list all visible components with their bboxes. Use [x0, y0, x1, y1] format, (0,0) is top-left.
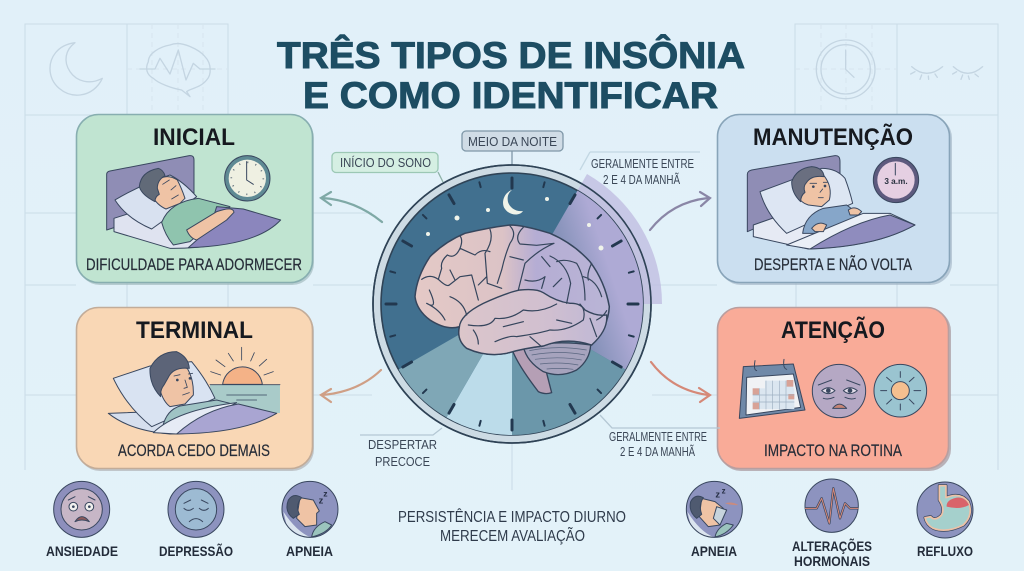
- sector: early waking mid: [399, 304, 512, 417]
- illustration: man waking at sunrise: [108, 347, 280, 434]
- text: persistencia: PERSISTÊNCIA E IMPACTO DIURNO: [398, 509, 626, 526]
- icon: apneia right: z: [715, 490, 720, 500]
- label: inicio do sono: INÍCIO DO SONO: [340, 155, 431, 170]
- illustration: man awake in bed with clock: [107, 156, 281, 248]
- icon: apneia left: [282, 481, 338, 537]
- panel: terminal: [76, 308, 314, 471]
- icon: apneia left: z: [319, 495, 324, 505]
- arrow: to manutencao: [650, 192, 710, 230]
- arrow: to inicial: [321, 192, 382, 222]
- label: meio da noite: MEIO DA NOITE: [468, 134, 557, 149]
- caption: acorda cedo: ACORDA CEDO DEMAIS: [118, 442, 270, 460]
- label: apneia left: APNEIA: [286, 543, 333, 559]
- sector: mid-night lavender: [512, 191, 643, 370]
- label: alteracoes hormonais: ALTERAÇÕES: [792, 537, 872, 554]
- caption: dificuldade: DIFICULDADE PARA ADORMECER: [86, 256, 302, 274]
- text: persistencia: [398, 509, 626, 545]
- caption: desperta: DESPERTA E NÃO VOLTA: [754, 254, 912, 274]
- label: geralmente entre top: GERALMENTE ENTRE: [591, 156, 694, 171]
- icon: apneia left: z: [323, 489, 328, 499]
- icon: apneia right: z: [722, 486, 726, 495]
- icon: tired face: [812, 364, 866, 418]
- illustration: brain: [415, 225, 609, 394]
- label: despertar precoce: DESPERTAR: [368, 437, 437, 452]
- icon: ghost clock: [816, 40, 875, 99]
- clock ticks: [386, 178, 638, 430]
- text: persistencia: MERECEM AVALIAÇÃO: [440, 528, 585, 545]
- icon: hormonal wave: [805, 479, 858, 532]
- icon: sun: [874, 364, 927, 417]
- heading: inicial: INICIAL: [153, 124, 235, 151]
- caption: impacto: IMPACTO NA ROTINA: [764, 442, 902, 460]
- panel: atencao: [718, 308, 951, 471]
- label: alteracoes hormonais: HORMONAIS: [794, 553, 870, 569]
- icon: calendar: [739, 359, 805, 418]
- label: geralmente entre bottom: GERALMENTE ENTRE: [609, 429, 707, 444]
- label: ansiedade: ANSIEDADE: [46, 543, 118, 559]
- label: geralmente entre bottom: [600, 415, 720, 459]
- icon: ansiedade: [54, 481, 110, 537]
- title: [277, 34, 745, 116]
- heading: terminal: TERMINAL: [136, 317, 253, 344]
- illustration: man awake at 3am: [747, 156, 919, 249]
- title: TRÊS TIPOS DE INSÔNIA: [277, 34, 745, 76]
- label: despertar precoce: PRECOCE: [375, 454, 430, 469]
- label: meio da noite: [462, 131, 563, 166]
- sector halo: lavender beyond dial: [512, 174, 662, 304]
- icon: apneia right: [686, 481, 742, 537]
- icon: ghost brain wave: [140, 44, 215, 97]
- icon: moon and stars: [426, 190, 604, 250]
- heading: manutencao: MANUTENÇÃO: [753, 123, 913, 151]
- label: refluxo: REFLUXO: [917, 543, 973, 559]
- chart: clock dial: [373, 165, 662, 443]
- label: depressao: DEPRESSÃO: [159, 542, 233, 559]
- panel: manutencao: [718, 114, 952, 285]
- label: despertar precoce: [360, 428, 442, 469]
- illustration: man awake at 3am: 3 a.m.: [884, 176, 908, 186]
- label: geralmente entre top: [580, 152, 700, 187]
- title: E COMO IDENTIFICAR: [303, 75, 718, 116]
- label: geralmente entre bottom: 2 E 4 DA MANHÃ: [620, 444, 695, 459]
- arrow: to atencao: [651, 362, 710, 402]
- label: alteracoes hormonais: [792, 537, 872, 569]
- arrow: to terminal: [321, 370, 381, 402]
- label: geralmente entre top: 2 E 4 DA MANHÃ: [603, 172, 680, 187]
- icon: stomach: [917, 482, 973, 538]
- icon: depressao: [168, 481, 224, 537]
- label: apneia right: APNEIA: [691, 543, 737, 559]
- label: inicio do sono: [332, 152, 443, 182]
- sector: early waking light: [446, 304, 512, 435]
- sector: bottom right: [512, 304, 625, 435]
- icon: ghost closed eyes: [911, 67, 983, 79]
- icon: ghost moon: [50, 43, 102, 95]
- heading: atencao: ATENÇÃO: [781, 316, 885, 344]
- panel: inicial: [76, 114, 314, 285]
